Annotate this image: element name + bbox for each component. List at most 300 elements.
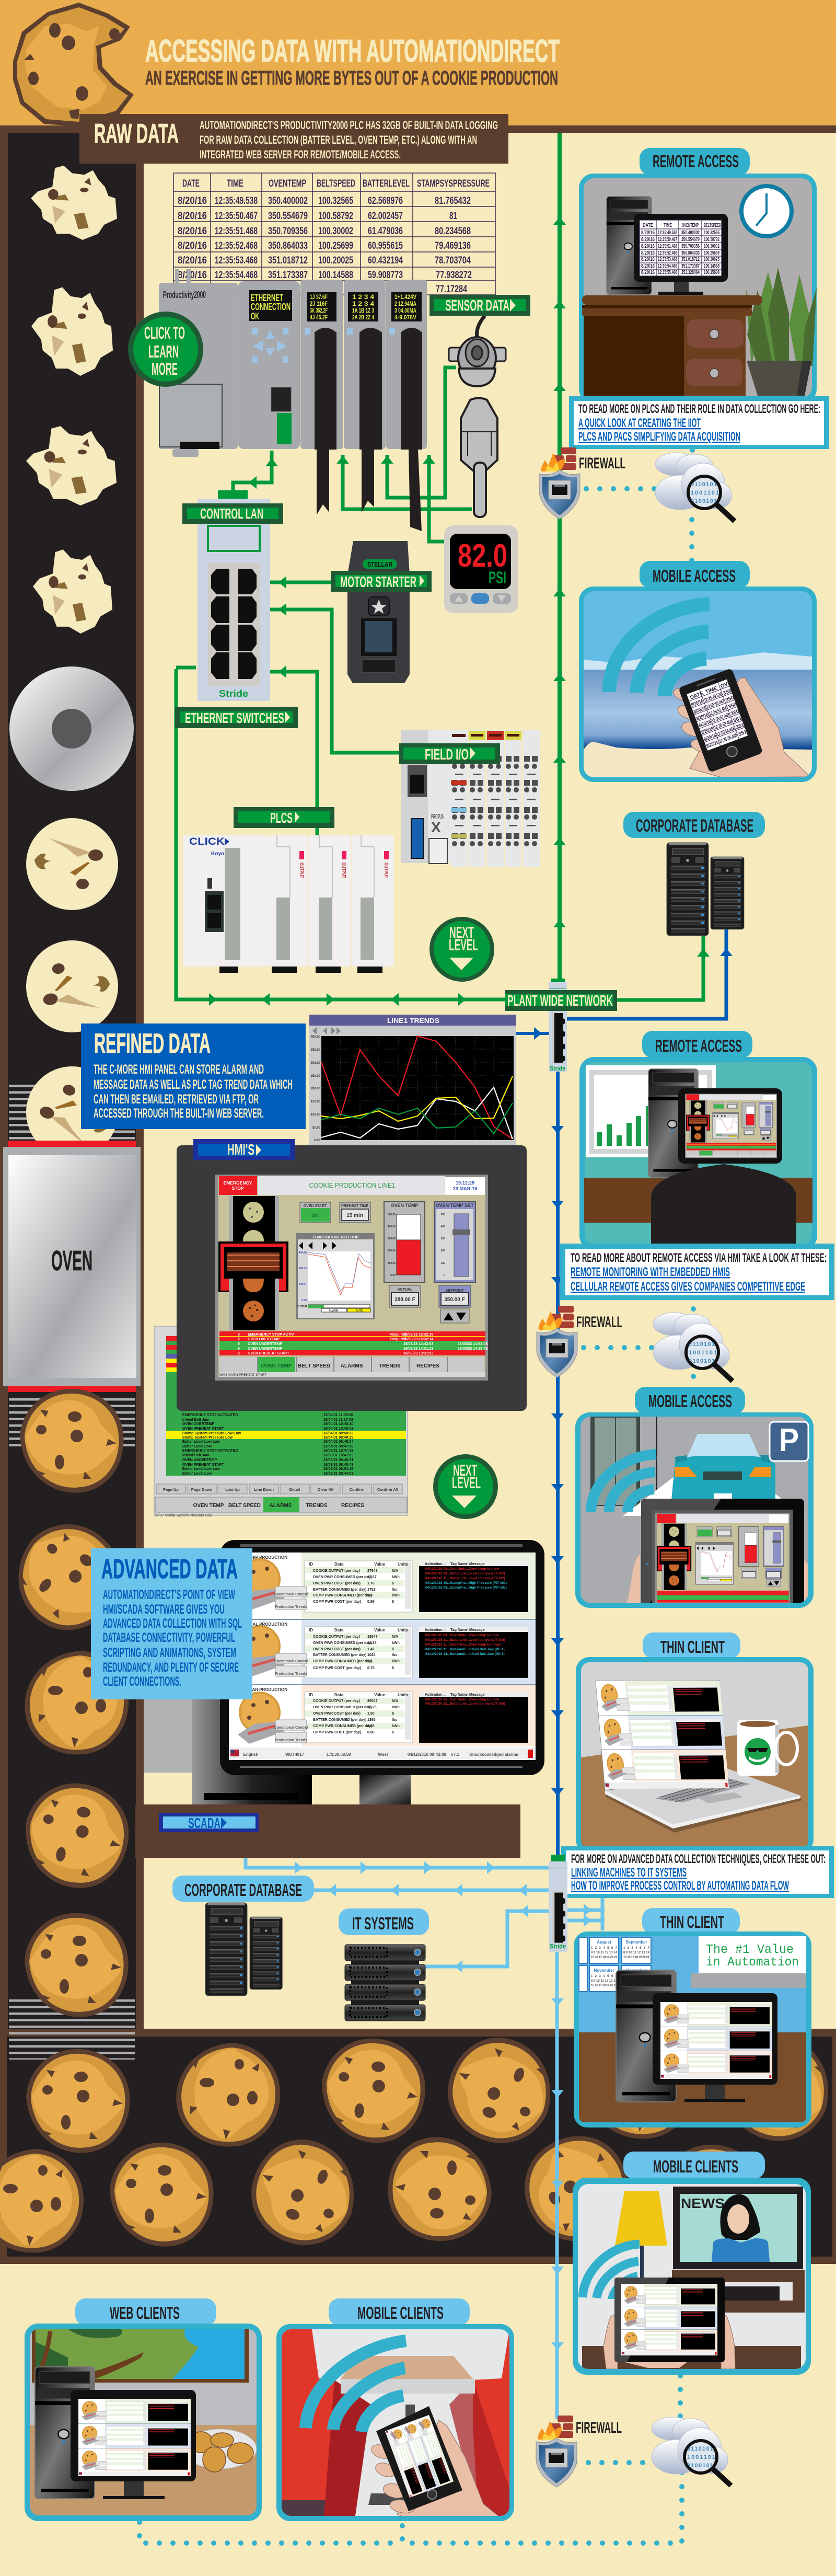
icon: cloud data 1: 1001101 — [691, 490, 719, 496]
scada monitor: BeltJamD... — [450, 1652, 469, 1656]
raw data table: 100.32565 — [318, 196, 353, 206]
pill: web clients — [75, 2298, 216, 2326]
scada monitor: OVEN PWR CONSUMED (per day) — [313, 1576, 371, 1579]
hmi panel: 500 — [441, 1213, 445, 1216]
links to corporate database — [566, 929, 733, 1019]
belt stripes — [9, 1084, 135, 2060]
scada monitor: Units — [398, 1562, 409, 1567]
next level button 1: NEXT — [449, 923, 474, 941]
panel: refined data: REFINED DATA — [94, 1028, 211, 1059]
scada monitor: Tag Name — [450, 1693, 468, 1697]
scada monitor: 18547 — [367, 1635, 378, 1639]
hmi panel: 100 — [441, 1262, 445, 1265]
scada monitor: Operational Control — [274, 1660, 308, 1663]
motor starter label: MOTOR STARTER — [340, 574, 416, 591]
scada monitor: Infeed Belt Jam (PE-1) — [469, 1652, 505, 1656]
PLC rack: Productivity2000: 3K 352.2F — [310, 307, 328, 314]
icon: stamped dough rounds — [13, 818, 131, 1171]
icon: pressure sensor — [461, 398, 497, 517]
panel: thin client desktop: 8 9 10 11 12 13 14 — [591, 1980, 618, 1983]
chart: line1 trends — [309, 1015, 516, 1145]
scada monitor: BatterLow... — [450, 1572, 469, 1576]
raw data table: 79.469136 — [435, 240, 471, 251]
scada monitor: 1.76 — [367, 1582, 375, 1585]
sensor data label: SENSOR DATA — [445, 297, 509, 314]
icon: click plc modules — [183, 835, 394, 973]
scada monitor: 04/12/2016 09... — [425, 1634, 450, 1637]
plant wide network label — [505, 990, 617, 1011]
raw data table: 77.938272 — [436, 270, 472, 281]
pill: mobile clients 2 — [329, 2298, 470, 2326]
scada monitor: ID — [309, 1693, 313, 1697]
PLC rack: Productivity2000 — [159, 269, 427, 531]
button: click to learn more: MORE — [152, 359, 178, 378]
raw data table: 77.17284 — [436, 284, 467, 295]
chart: line1 trends: 300.00 — [311, 1062, 321, 1065]
icon: plant-wide switch: Stride — [550, 1065, 565, 1072]
scada monitor: CHOCOLATE CHIP PRODUCTION — [221, 1555, 287, 1560]
alarm history screen: 16/03/31 08:54:18 — [323, 1467, 353, 1471]
hmi panel: 0 — [444, 1274, 445, 1277]
scada monitor: Oven temp too low — [469, 1634, 500, 1637]
PLC rack: Productivity2000: 3 04.00MA — [394, 307, 416, 314]
callout: advanced reading links: LINKING MACHINES TO IT SYSTEMS — [571, 1866, 687, 1880]
scada monitor: OVEN PWR COST (per day) — [313, 1648, 361, 1651]
icon: corporate database servers 2 — [205, 1903, 282, 1996]
main green network line — [551, 133, 566, 982]
hmi panel: 100.00 — [388, 1262, 396, 1265]
scada monitor: Production Trends — [275, 1605, 307, 1609]
raw data table: 59.908773 — [368, 270, 403, 281]
icon: baked cookies vertical — [0, 1389, 142, 2017]
panel: mobile access beach: 350 — [725, 695, 735, 703]
scada monitor: Data — [334, 1562, 344, 1567]
scada monitor: v7.1 — [451, 1752, 459, 1757]
scada monitor: $ — [392, 1648, 394, 1651]
scada monitor: N/A — [392, 1699, 398, 1703]
scada monitor: Tag Name — [450, 1628, 468, 1632]
scada label — [159, 1813, 259, 1832]
hmi label: HMI'S — [227, 1142, 254, 1158]
alarm history screen: Stamp System Pressure Low Low — [182, 1432, 241, 1435]
scada monitor: Oven temp too low — [469, 1698, 500, 1701]
scada monitor: BATTER CONSUMED (per day) — [313, 1653, 366, 1657]
conveyor belt vertical — [0, 133, 144, 2037]
panel: thin client desktop: 15 16 17 18 19 20 21 — [591, 1956, 618, 1959]
pill: it systems — [339, 1908, 429, 1935]
panel: remote access office: 8/20/16 — [641, 263, 655, 269]
raw data table: 351.173387 — [268, 270, 308, 281]
scada monitor: 1.50 — [367, 1712, 375, 1716]
scada monitor: Oven temp too low — [469, 1567, 500, 1571]
icon: scada switch: Stride — [550, 1943, 566, 1950]
alarm history screen: 16/04/01 08:48:29 — [323, 1436, 353, 1440]
panel: remote access office: TIME — [664, 223, 672, 228]
panel: thin client desktop: 1 2 3 4 5 6 7 — [591, 1947, 618, 1950]
alarm history screen: 16/03/31 18:47:13 — [323, 1449, 353, 1453]
chart: line1 trends: 50.00 — [312, 1126, 321, 1130]
raw data table: 100.14588 — [318, 270, 353, 281]
panel: advanced data: ADVANCED DATA — [101, 1554, 238, 1584]
firewall label 3: FIREWALL — [576, 2419, 622, 2436]
scada monitor: Activation ... — [425, 1628, 447, 1632]
scada monitor: COMP PWR COST (per day) — [313, 1666, 361, 1670]
panel: mobile access beach: 8/20/16 — [693, 705, 707, 715]
raw data table: 12:35:52.468 — [215, 240, 258, 251]
panel: advanced data: AUTOMATIONDIRECT'S POINT OF VIEW — [103, 1588, 235, 1602]
hmi panel: 500.00 — [388, 1213, 396, 1216]
panel: advanced data: HMI/SCADA SOFTWARE GIVES YOU — [103, 1602, 225, 1617]
raw data table: TIME — [227, 178, 243, 189]
scada monitor: Operational Control — [274, 1726, 308, 1730]
panel: web clients — [25, 2324, 262, 2521]
panel: mobile access beach: 8/20/16 — [690, 698, 704, 708]
scada monitor: Oven temp too high — [469, 1643, 501, 1647]
PLC rack: Productivity2000: 2J 116F — [310, 300, 328, 307]
scada monitor: 9.9 — [367, 1594, 373, 1597]
raw data table: 100.58792 — [318, 211, 353, 222]
raw data table: 12:35:51.468 — [215, 226, 258, 237]
scada monitor: OATMEAL PRODUCTION — [238, 1622, 287, 1627]
panel: remote access office: 350.864033 — [681, 250, 700, 256]
panel: mobile access beach: OVENTEMP — [719, 674, 749, 689]
icon: cloud data 2: 0100101 — [689, 1358, 715, 1364]
panel: remote access office: 8/20/16 — [641, 257, 655, 262]
control lan label — [182, 503, 283, 524]
icon: stamping disc — [9, 666, 134, 791]
icon: baked cookies horizontal — [0, 2022, 836, 2260]
alarm history screen: 16/03/31 18:47:03 — [323, 1454, 353, 1457]
dotted link to cloud 3 — [572, 2373, 684, 2544]
panel: thin client desktop: December — [626, 1968, 646, 1973]
pill: thin client 2: THIN CLIENT — [660, 1912, 724, 1931]
pill: remote access 2 — [642, 1031, 752, 1058]
alarm history screen: Detail — [289, 1487, 300, 1492]
hmi panel: 16/03/23 13:31:53 — [403, 1352, 433, 1355]
panel: mobile access beach: 8/20/16 — [698, 719, 712, 729]
PLC rack: Productivity2000: 1 2 3 4 — [352, 300, 374, 307]
icon: pressure display: 82.0 — [458, 538, 507, 574]
PLC rack: Productivity2000: OK — [251, 311, 259, 321]
scada monitor: StampPre... — [450, 1586, 469, 1590]
icon: cloud data 1: 0100101 — [691, 498, 717, 504]
hmi panel: 15:12:29 — [456, 1180, 474, 1186]
icon: it server rack — [345, 1945, 425, 2021]
panel: mobile access beach: 12:35:51.468 — [709, 705, 728, 717]
panel: mobile access beach: 12:35:53.468 — [713, 719, 733, 731]
ethernet switches label — [175, 707, 298, 728]
raw data table: 12:35:49.538 — [215, 196, 258, 206]
chart: line1 trends: 400.00 — [311, 1036, 321, 1039]
icon: motor starter: STELLAR — [367, 560, 392, 568]
scada monitor: kWh — [392, 1594, 400, 1597]
panel: remote access office: 351.018712 — [681, 257, 700, 262]
icon: click plc modules: Koyo — [211, 851, 224, 857]
panel: refined data: CAN THEN BE EMAILED, RETRIEVED VIA FTP, OR — [94, 1092, 259, 1107]
panel: advanced data: ADVANCED DATA COLLECTION WITH SQL — [103, 1616, 242, 1631]
raw data table: 8/20/16 — [178, 255, 207, 266]
scada monitor: OverUnde... — [450, 1567, 469, 1571]
callout: advanced reading links — [561, 1846, 834, 1898]
panel: thin client desktop: November — [594, 1968, 614, 1973]
pill: it systems: IT SYSTEMS — [352, 1914, 414, 1933]
scada monitor: 27648 — [367, 1569, 378, 1573]
alarm history screen: Batter Level Low — [182, 1445, 212, 1448]
scada monitor: High Pressure (PIT-101) — [469, 1581, 507, 1585]
scada monitor: Value — [374, 1562, 385, 1567]
raw data table: 100.25699 — [318, 240, 353, 251]
hmi panel — [177, 1145, 527, 1411]
icon: cloud data 2 — [653, 1313, 733, 1381]
panel: mobile access parking — [575, 1412, 814, 1615]
hmi panel: OVEN OVERTEMP — [248, 1338, 280, 1341]
pill: remote access 1: REMOTE ACCESS — [653, 152, 739, 171]
panel: remote access office: 100.32565 — [704, 230, 719, 236]
panel: advanced data — [91, 1548, 252, 1699]
scada monitor: COOKIE OUTPUT (per day) — [313, 1635, 360, 1639]
panel: refined data — [81, 1024, 306, 1129]
scada label: SCADA — [188, 1815, 220, 1831]
alarm history screen: 16/04/01 08:47:58 — [323, 1445, 353, 1448]
pill: corporate database 2 — [172, 1876, 314, 1902]
hmi panel: OVEN UNDERTEMP — [248, 1347, 282, 1351]
scada monitor: Message — [469, 1628, 485, 1632]
alarm history screen: RECIPES — [341, 1503, 364, 1509]
panel: thin client desktop: 1 2 3 4 5 6 7 — [591, 1975, 618, 1978]
next level button 2: NEXT — [453, 1461, 477, 1479]
raw data table: STAMPSYSPRESSURE — [417, 178, 490, 189]
panel: mobile access beach: 8/20/16 — [706, 740, 719, 750]
PLC rack: Productivity2000: 1+1.424V — [394, 293, 416, 301]
icon: click plc modules: CLICK — [189, 836, 225, 847]
icon: motor starter — [347, 541, 410, 683]
panel: thin client laptop — [576, 1657, 814, 1853]
icon: encoder sensor — [449, 316, 506, 386]
scada monitor: 172.30.58.59 — [327, 1752, 351, 1757]
hmi panel: STOP — [232, 1186, 244, 1191]
hmi panel: 23-MAR-16 — [453, 1186, 477, 1191]
hmi panel: OVEN TEMP SET — [436, 1203, 474, 1208]
raw data table: 12:35:50.467 — [215, 211, 258, 222]
panel: remote access office: 100.20025 — [704, 257, 719, 262]
plant wide network label: PLANT WIDE NETWORK — [507, 993, 613, 1009]
panel: remote access office: 350.554679 — [681, 237, 700, 243]
scada monitor: Value — [374, 1693, 385, 1697]
hmi panel: 350.00 F — [444, 1297, 465, 1303]
raw data table: 8/20/16 — [178, 196, 207, 206]
scada monitor: kWh — [392, 1724, 400, 1728]
raw data table: 78.703704 — [435, 255, 471, 266]
scada monitor: OverUnde... — [450, 1634, 469, 1637]
icon: pressure display: PSI — [489, 568, 506, 587]
icon: raw dough pieces — [26, 166, 117, 634]
plcs label: PLCS — [270, 810, 293, 826]
panel: mobile access beach: 12:35:50.467 — [706, 698, 726, 710]
hmi panel: 03/03 OVEN PREHEAT START — [219, 1373, 266, 1377]
raw data panel: FOR RAW DATA COLLECTION (BATTER LEVEL, OVEN TEMP, ETC.) ALONG WITH AN — [200, 133, 477, 146]
hmi panel: SETPOINT — [445, 1289, 464, 1293]
pill: remote access 1 — [640, 148, 750, 175]
alarm history screen: Line Up — [225, 1487, 240, 1492]
button: click to learn more — [128, 312, 203, 387]
panel: remote access office: 350.709356 — [681, 244, 700, 249]
hmi panel: 0.00 — [301, 1299, 307, 1302]
scada monitor: 0.99 — [367, 1600, 375, 1604]
scada monitor: COMP PWR COST (per day) — [313, 1731, 361, 1734]
panel: mobile access beach: 351 — [738, 729, 748, 738]
plcs label — [234, 807, 334, 828]
raw data table: 12:35:53.468 — [215, 255, 258, 266]
scada monitor: 04/12/2016 06... — [425, 1698, 450, 1701]
scada monitor: Message — [469, 1693, 485, 1697]
hmi panel: COOKIE PRODUCTION LINE1 — [309, 1181, 395, 1189]
scada monitor: Level too low (LIT-102) — [469, 1572, 505, 1576]
field i/o label — [399, 743, 500, 764]
hmi panel: Required — [390, 1333, 406, 1337]
scada monitor: $ — [392, 1731, 394, 1734]
scada monitor: English — [243, 1752, 259, 1757]
hmi panel: 444.00 — [299, 1251, 307, 1255]
pill: mobile clients 1 — [623, 2152, 765, 2179]
scada monitor: OVEN PWR CONSUMED (per day) — [313, 1706, 371, 1709]
hmi panel: ALARMS — [341, 1363, 363, 1369]
alarm history screen: 16/03/31 09:48:21 — [323, 1458, 353, 1462]
scada monitor: OVEN PWR COST (per day) — [313, 1582, 361, 1585]
raw data table: 81 — [449, 211, 457, 222]
icon: firewall 2 — [537, 1306, 577, 1377]
button: click to learn more: LEARN — [148, 342, 179, 361]
raw data table: 8/20/16 — [178, 270, 207, 281]
scada monitor: Units — [398, 1693, 409, 1697]
alarm history screen — [154, 1326, 408, 1517]
alarm history screen: Batter Level Low — [182, 1472, 212, 1476]
panel: mobile access beach — [579, 586, 817, 782]
panel: mobile clients living room — [573, 2178, 811, 2375]
hmi panel: 6 — [238, 1347, 240, 1351]
scada monitor: 17.57 — [367, 1576, 377, 1579]
panel: remote access office: 8/20/16 — [641, 244, 655, 249]
panel: mobile access beach: 351 — [735, 722, 746, 731]
scada monitor: 04/12/2016 09... — [425, 1567, 450, 1571]
panel: remote access office: 100.15898 — [704, 270, 719, 275]
scada monitor: 15.25 — [367, 1706, 377, 1709]
pill: thin client 1 — [643, 1632, 740, 1659]
PLC rack: Productivity2000: 2A 2B 2Z 4 — [352, 314, 374, 321]
hmi panel: 3 — [238, 1333, 240, 1337]
hmi panel: ACTUAL — [398, 1288, 413, 1292]
hmi panel: OUTPUT — [296, 1305, 307, 1308]
next level button 1 — [429, 917, 494, 982]
panel: remote access office: 350.400002 — [681, 230, 700, 236]
alarm history screen: Clear All — [318, 1487, 333, 1492]
pill: thin client 2 — [642, 1908, 740, 1934]
hmi panel: 0.00 — [390, 1274, 396, 1277]
hmi panel: EMERGENCY — [224, 1180, 252, 1186]
PLC rack: Productivity2000: 4-9.076V — [394, 314, 416, 321]
hmi panel: OVEN UNDERTEMP — [248, 1342, 282, 1346]
raw data panel: INTEGRATED WEB SERVER FOR REMOTE/MOBILE ACCESS. — [200, 148, 401, 161]
icon: pressure display — [444, 525, 518, 613]
chart: line1 trends: 150.00 — [311, 1100, 321, 1103]
hmi panel: 400 — [441, 1225, 445, 1228]
panel: remote access office: 12:35:54.468 — [658, 263, 677, 269]
icon: cloud data 2: 1001101 — [689, 1350, 717, 1356]
alarm history screen: Confirm — [350, 1487, 365, 1492]
hmi panel: OVEN START — [304, 1204, 327, 1208]
panel: remote access office: 100.14588 — [704, 263, 719, 269]
PLC rack: Productivity2000: 1 2 3 4 — [352, 293, 374, 301]
scada monitor: 0.86 — [367, 1731, 375, 1734]
light blue arrows — [295, 1861, 591, 2350]
alarm history screen: EMERGENCY STOP ACTIVATED — [182, 1413, 238, 1417]
panel: remote access office: 100.30002 — [704, 244, 719, 249]
hmi panel: Required — [390, 1338, 406, 1341]
panel: thin client desktop: 1 2 3 4 5 6 7 — [623, 1947, 650, 1950]
panel: mobile access beach: 12:35:54.468 — [716, 726, 736, 738]
PLC rack: Productivity2000: CONNECTION — [251, 302, 291, 312]
raw data table: 60.432194 — [368, 255, 403, 266]
scada monitor: Message — [469, 1562, 485, 1566]
hmi panel: 200.00 — [388, 1249, 396, 1252]
raw data table: 100.20025 — [318, 255, 353, 266]
panel: mobile access beach: 350 — [730, 708, 740, 717]
alarm history screen: Page Up — [163, 1487, 179, 1492]
chart: line1 trends: 200.00 — [311, 1087, 321, 1090]
scada monitor: kWh — [392, 1576, 400, 1579]
raw data table: 8/20/16 — [178, 211, 207, 222]
raw data panel: RAW DATA — [94, 119, 179, 149]
icon: click plc modules: OUTPUT — [383, 862, 389, 878]
PLC rack: Productivity2000: 1A 1B 1Z 3 — [352, 307, 374, 314]
icon: field i/o block: PROTUS — [431, 813, 444, 820]
panel: thin client desktop: 8 9 10 11 12 13 14 — [591, 1951, 618, 1954]
panel: remote access office: BELTSPEED — [704, 223, 721, 228]
panel: thin client desktop: August — [597, 1940, 611, 1945]
raw data table: 100.30002 — [318, 226, 353, 237]
panel: remote access office: 8/20/16 — [641, 230, 655, 236]
panel: mobile access beach: 12:35:52.468 — [711, 712, 730, 724]
panel: remote access office: OVENTEMP — [682, 223, 699, 228]
raw data table: 350.400002 — [268, 196, 308, 206]
hmi panel: 16/03/23 16:32:14 — [403, 1338, 433, 1341]
raw data table: 60.955615 — [368, 240, 403, 251]
chart: line1 trends: 250.00 — [311, 1075, 321, 1078]
PLC rack: Productivity2000: Productivity2000 — [163, 290, 206, 300]
scada monitor: lbs — [392, 1653, 397, 1657]
scada monitor: 04/12/2016 11... — [425, 1648, 450, 1651]
ethernet switches label: ETHERNET SWITCHES — [185, 710, 284, 726]
alarm history screen: TRENDS — [306, 1503, 328, 1509]
scada monitor: 04/12/2016 12... — [425, 1702, 450, 1706]
panel: remote access office: 8/20/16 — [641, 250, 655, 256]
firewall label 2: FIREWALL — [576, 1314, 622, 1331]
icon: cloud data 1: 0110101 — [691, 481, 717, 488]
scada monitor: 04/12/2016 11... — [425, 1643, 450, 1647]
icon: cloud data 1 — [655, 453, 735, 521]
title: ACCESSING DATA WITH AUTOMATIONDIRECT — [145, 33, 560, 68]
scada monitor: BeltJamD... — [450, 1648, 469, 1651]
panel: mobile clients train — [276, 2324, 514, 2525]
raw data table: BELTSPEED — [317, 178, 355, 189]
scada monitor: $ — [392, 1600, 394, 1604]
PLC rack: Productivity2000: ETHERNET — [251, 293, 283, 303]
panel: mobile access beach: 12:35:55.468 — [718, 733, 738, 745]
motor starter label — [331, 571, 432, 592]
scada monitor: OVEN PWR COST (per day) — [313, 1712, 361, 1716]
icon: ethernet switch: Stride — [219, 688, 248, 699]
panel: remote access office: 8/20/16 — [641, 237, 655, 243]
next level button 2 — [433, 1454, 498, 1519]
